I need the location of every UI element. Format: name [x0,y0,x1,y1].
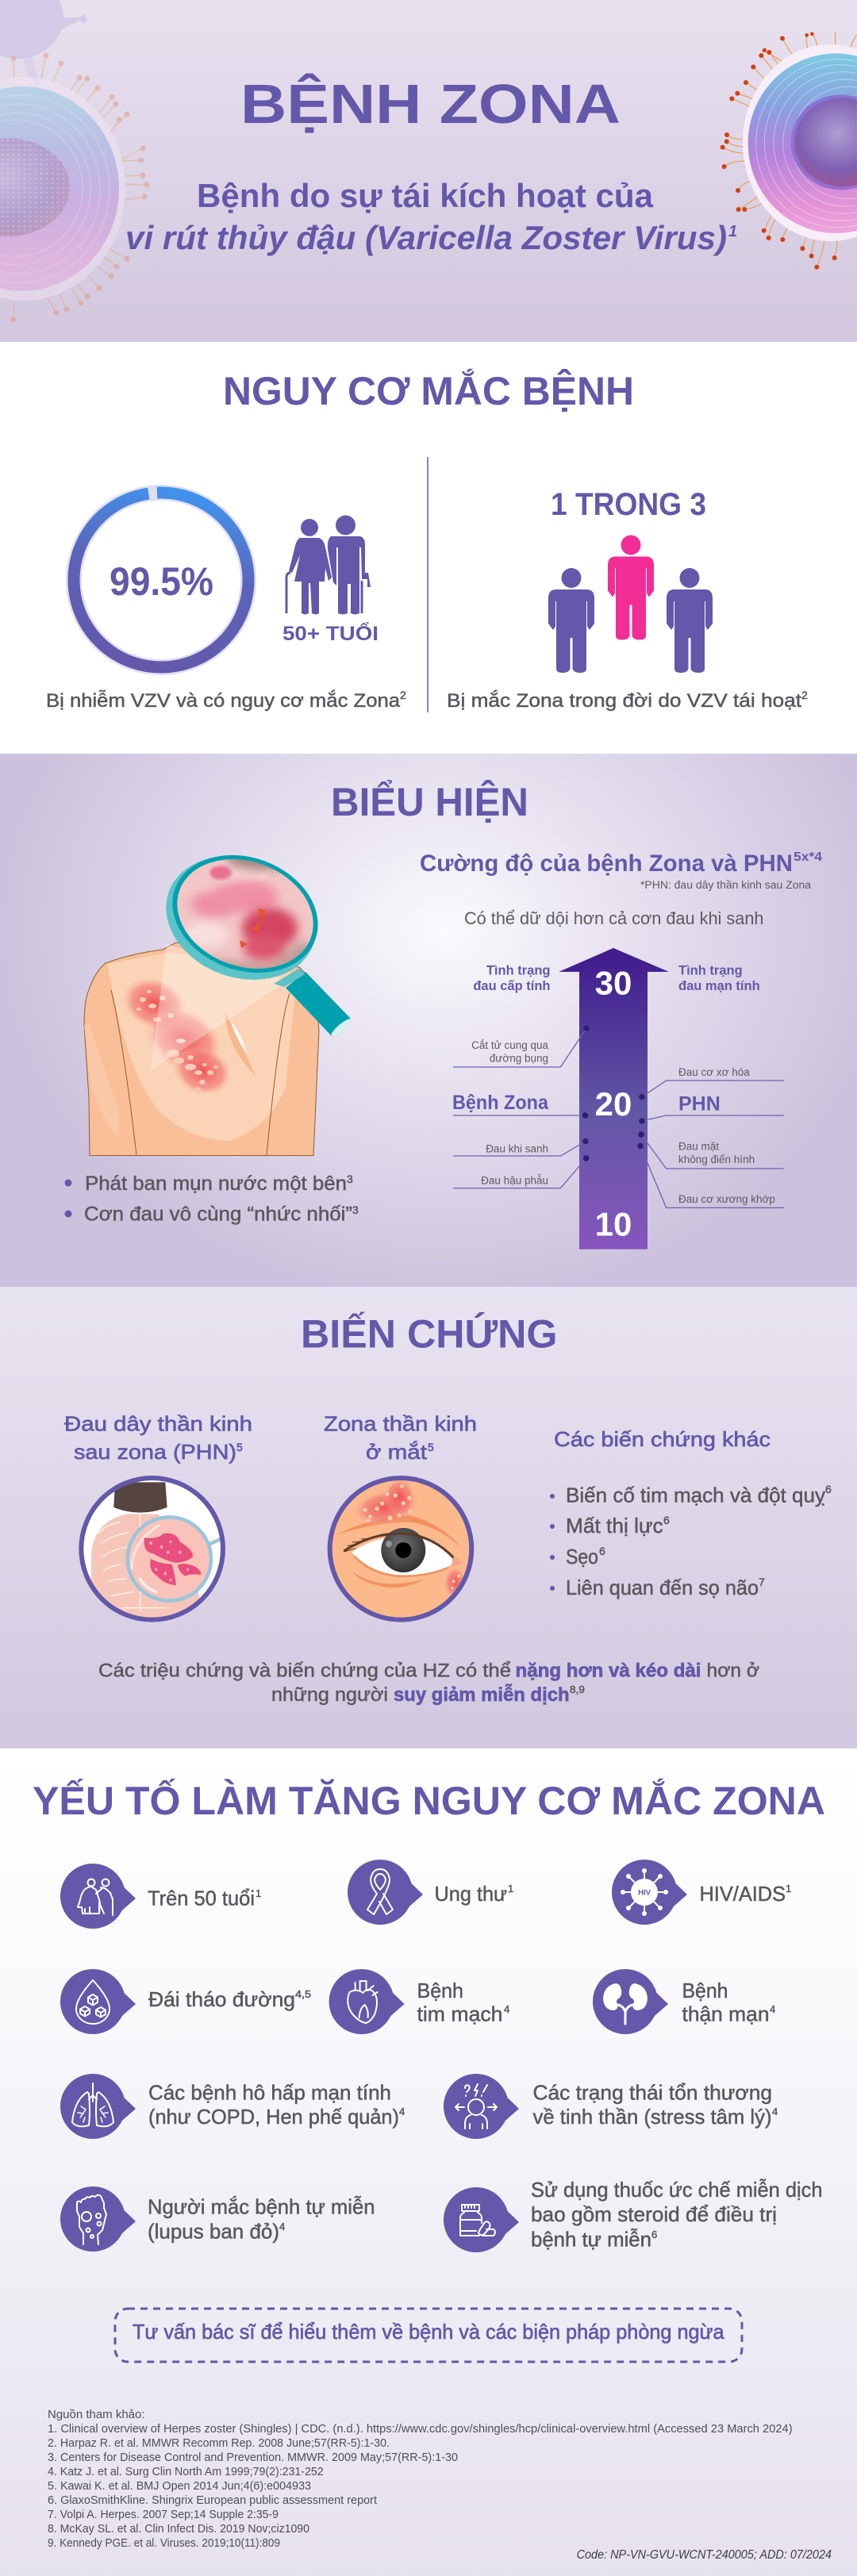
icon: three people [548,535,713,673]
scale 20: 20 [595,1085,632,1123]
note: immunocompromised [98,1660,759,1706]
subtitle line 1: Bệnh do sự tái kích hoạt của [197,177,654,214]
label [417,1979,509,2026]
icon: stressed person [444,2074,519,2139]
caption: shingles in lifetime: 2 [801,689,808,701]
factor: HIV/AIDS [612,1860,791,1925]
symptoms list: 3 [352,1204,359,1216]
label: bao gồm steroid để điều trị [531,2202,777,2226]
label: 4 [772,2106,778,2117]
callout: consult doctor [115,2309,742,2362]
marker: fibromyalgia: Đau cơ xơ hóa [678,1066,750,1078]
icon: ribbon [348,1860,423,1925]
icon: virus HIV: HIV [638,1888,651,1898]
subtitle line 2: 1 [728,223,737,240]
label: Người mắc bệnh tự miễn [148,2195,375,2219]
note: immunocompromised: hơn ở [706,1660,759,1682]
progress ring 99.5% [70,489,252,671]
marker: atypical facial pain: không điển hình [678,1154,755,1165]
marker: arthritis [637,1143,784,1207]
chart: pain intensity arrow [452,948,784,1250]
marker: fibromyalgia [639,1066,784,1100]
factor: diabetes: 4,5 [295,1988,311,2000]
icon: heart [329,1969,405,2034]
note: immunocompromised: nặng hơn và kéo dài [516,1660,701,1682]
illustration: eye with rash in circle [330,1478,471,1620]
illustration: torso with rash and magnifier [84,835,353,1155]
list: other complications [550,1483,832,1599]
factor: mental stress [444,2074,778,2139]
icon: drop with sugar cubes [60,1969,136,2034]
column heading: PHN [64,1412,252,1464]
label: chronic pain [678,964,760,993]
marker: post-surgery [453,1155,589,1188]
footnote: PHN: *PHN: đau dây thần kinh sau Zona [640,879,811,891]
factor: cardiovascular [329,1969,509,2034]
chart title: 5x*4 [794,850,822,864]
icon: elderly [60,1864,136,1929]
rash [115,969,239,1104]
stat: 1 in 3: 1 TRONG 3 [551,487,706,522]
marker: abdominal hysterectomy [453,1025,590,1067]
marker: abdominal hysterectomy: đường bụng [490,1053,548,1065]
factor: respiratory [60,2074,405,2139]
marker: abdominal hysterectomy: Cắt tử cung qua [471,1039,548,1051]
label: Bệnh [682,1979,728,2002]
magnified light cone [151,944,288,1070]
list: other complications: 6 [599,1545,605,1557]
subtitle line 2: vi rút thủy đậu (Varicella Zoster Virus) [125,219,727,256]
illustration: faded virus left [0,52,149,322]
label: 4 [279,2221,285,2232]
factor: autoimmune [60,2186,375,2252]
column heading: ophthalmic: ở mắt [366,1440,428,1464]
scale 30: 30 [595,965,632,1001]
label: 4 [399,2106,405,2117]
column heading: ophthalmic: 5 [428,1441,434,1453]
label [148,2081,405,2129]
factor: cancer: 1 [508,1883,513,1895]
marker: PHN [639,1093,784,1124]
heading: BIẾN CHỨNG [301,1312,557,1357]
label: 50+ age: 50+ TUỔI [282,621,379,645]
label [148,2195,375,2244]
symptoms list: Phát ban mụn nước một bên [85,1173,347,1195]
label: (như COPD, Hen phế quản) [148,2105,399,2129]
label: 4 [770,2003,775,2015]
caption: infected with VZV: 2 [400,689,406,701]
illustration: back with rash in circle [81,1478,224,1620]
label: Các bệnh hô hấp mạn tính [148,2081,391,2105]
panel: risk of disease [0,342,857,754]
panel: symptoms [0,754,857,1287]
column heading: ophthalmic: Zona thần kinh [324,1412,477,1436]
list: other complications: 6 [663,1514,670,1526]
torso [84,942,319,1155]
references: 9. Kennedy PGE. et al. Viruses. 2019;10(11):809 [48,2536,280,2550]
magnifier handle [286,972,351,1036]
heading: NGUY CƠ MẮC BỆNH [223,369,634,413]
factor: diabetes [60,1969,311,2034]
icon: hand with lesions [60,2186,136,2252]
marker: post-surgery: Đau hậu phẫu [481,1174,548,1187]
label: Các trạng thái tổn thương [533,2081,772,2105]
label: Ung thư [435,1882,507,1906]
label: Đái tháo đường [148,1987,295,2011]
factor: chronic kidney [593,1969,775,2034]
document code: Code: NP-VN-GVU-WCNT-240005; ADD: 07/2024 [577,2548,832,2562]
references: 6. GlaxoSmithKline. Shingrix European public assessment report [48,2493,378,2507]
references: 3. Centers for Disease Control and Prevention. MMWR. 2009 May;57(RR-5):1-30 [48,2451,458,2464]
references: Nguồn tham khảo: [48,2408,144,2421]
label: chronic pain: đau mạn tính [678,979,760,993]
factor: over 50: 1 [256,1887,261,1899]
panel: risk factors [0,1749,857,2576]
illustration: virus right [721,32,857,270]
list: other complications: 6 [825,1483,832,1495]
magnifier lens [166,855,318,980]
references: 1. Clinical overview of Herpes zoster (Shingles) | CDC. (n.d.). https://www.cdc.gov/shingles/hcp/clinical-overview.html (Accessed 23 March 2024) [48,2422,793,2436]
column heading: PHN: sau zona (PHN) [74,1440,236,1464]
label [682,1979,775,2026]
symptoms list: 3 [347,1173,353,1185]
references [48,2408,793,2550]
label [531,2178,822,2252]
label: acute pain: Tình trạng [486,964,551,978]
references: 8. McKay SL. et al. Clin Infect Dis. 2019 Nov;ciz1090 [48,2522,309,2536]
list: other complications: Mất thị lực [566,1514,663,1538]
illustration: faded blob top left [0,0,87,87]
factor: HIV/AIDS: 1 [786,1883,791,1895]
heading: BIỂU HIỆN [331,780,528,824]
column heading: ophthalmic [324,1412,477,1464]
label: acute pain [473,964,551,993]
marker: shingles: Bệnh Zona [452,1092,549,1114]
column heading: other complications: Các biến chứng khác [554,1427,771,1451]
chart title: Cường độ của bệnh Zona và PHN [420,850,793,877]
marker: childbirth [453,1138,589,1156]
note: immunocompromised: những người [271,1684,388,1706]
list: other complications: 7 [759,1576,765,1588]
person right [667,568,713,673]
panel: header [0,0,857,342]
label: acute pain: đau cấp tính [473,979,551,993]
marker: childbirth: Đau khi sanh [486,1142,548,1155]
references: 4. Katz J. et al. Surg Clin North Am 1999;79(2):231-252 [48,2465,324,2478]
label: (lupus ban đỏ) [148,2220,279,2244]
label: về tinh thần (stress tâm lý) [533,2105,771,2129]
references: 5. Kawai K. et al. BMJ Open 2014 Jun;4(6):e004933 [48,2479,311,2493]
marker: atypical facial pain: Đau mặt [678,1141,719,1153]
label: thận mạn [682,2002,770,2026]
label: tim mạch [417,2002,503,2026]
icon: elderly couple [286,516,371,614]
scale 10: 10 [595,1206,632,1243]
column heading: PHN: 5 [236,1441,243,1453]
label: Bệnh [417,1979,463,2002]
person left [548,568,594,673]
factor: over 50 [60,1864,261,1929]
marker: shingles [452,1092,588,1119]
list: other complications: Sẹo [566,1545,598,1568]
icon: kidneys [593,1969,668,2034]
label: 6 [651,2229,657,2240]
heading: YẾU TỐ LÀM TĂNG NGUY CƠ MẮC ZONA [33,1778,825,1823]
callout: consult doctor: Tư vấn bác sĩ để hiểu thêm về bệnh và các biện pháp phòng ngừa [133,2320,724,2344]
arrow [559,948,669,1250]
factor: immunosuppressants [444,2178,822,2252]
note: immunocompromised: 8,9 [570,1683,585,1695]
symptoms list: Cơn đau vô cùng “nhức nhối” [84,1203,352,1225]
title: BỆNH ZONA [240,72,621,135]
references: 7. Volpi A. Herpes. 2007 Sep;14 Supple 2:35-9 [48,2508,279,2521]
caption: infected with VZV: Bị nhiễm VZV và có nguy cơ mắc Zona [46,690,401,712]
factor: cancer [348,1860,513,1925]
column heading: PHN: Đau dây thần kinh [64,1412,252,1436]
label: chronic pain: Tình trạng [678,964,743,978]
references: 2. Harpaz R. et al. MMWR Recomm Rep. 2008 June;57(RR-5):1-30. [48,2436,390,2450]
marker: PHN: PHN [678,1093,721,1115]
list: other complications: Liên quan đến sọ não [566,1576,759,1599]
chart subtitle: Có thể dữ dội hơn cả cơn đau khi sanh [464,908,763,928]
list: other complications: Biến cố tim mạch và đột quỵ [566,1484,825,1507]
label: Trên 50 tuổi [148,1887,255,1910]
label: HIV/AIDS [700,1882,786,1906]
note: immunocompromised: suy giảm miễn dịch [394,1683,570,1706]
label: bệnh tự miễn [531,2228,651,2252]
progress ring 99.5%: 99.5% [110,559,213,604]
icon: lungs [60,2074,136,2139]
note: immunocompromised: Các triệu chứng và biến chứng của HZ có thể [98,1660,511,1682]
panel: complications [0,1287,857,1749]
label: 4 [504,2003,509,2015]
person highlighted [608,535,654,639]
label: Sử dụng thuốc ức chế miễn dịch [531,2178,822,2202]
symptoms list [65,1173,359,1225]
icon: virus HIV [612,1860,687,1925]
icon: pill bottle [444,2187,519,2252]
marker: atypical facial pain [638,1131,784,1169]
caption: shingles in lifetime: Bị mắc Zona trong đời do VZV tái hoạt [447,690,801,712]
marker: arthritis: Đau cơ xương khớp [678,1193,775,1205]
label [533,2081,778,2129]
